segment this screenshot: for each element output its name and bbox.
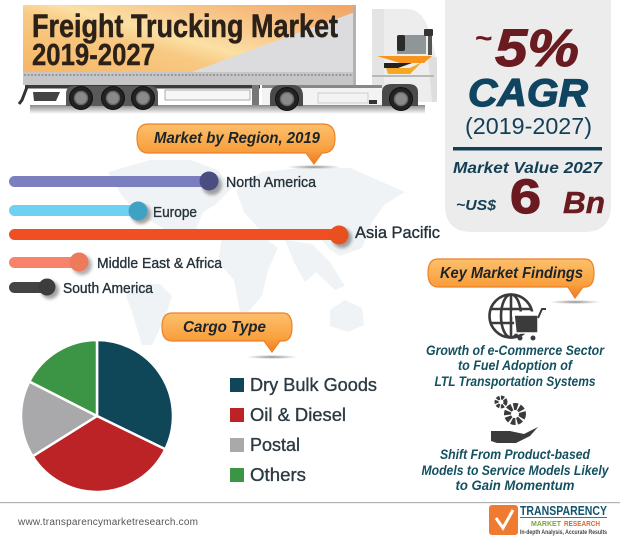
logo: Transparency Market Research xyxy=(489,504,608,536)
logo: Transparency Market Research: MARKET xyxy=(531,519,561,528)
icon: globe with shopping cart xyxy=(490,294,546,340)
finding: e-commerce: LTL Transportation Systems xyxy=(434,374,596,389)
bar: South America: South America xyxy=(63,281,154,297)
icon: hand with gears xyxy=(491,398,538,443)
callout: cargo type: Cargo Type xyxy=(183,319,266,336)
finding: e-commerce xyxy=(426,343,605,389)
logo: Transparency Market Research: In-depth Analysis, Accurate Results xyxy=(520,530,608,536)
chassis xyxy=(25,85,260,88)
bar: Middle East & Africa: Middle East & Africa xyxy=(97,256,223,272)
wheels xyxy=(70,86,412,110)
finding: service models: to Gain Momentum xyxy=(456,478,574,493)
bar: Asia Pacific xyxy=(9,223,440,248)
legend item: others: Others xyxy=(250,464,306,485)
market value figure: Bn xyxy=(563,185,605,220)
bar chart: market by region xyxy=(9,172,440,299)
callout: key market findings: Key Market Findings xyxy=(440,265,583,282)
callout: key market findings xyxy=(428,259,601,304)
market value figure: ~US$ xyxy=(456,197,497,214)
legend item: dry bulk goods: Dry Bulk Goods xyxy=(250,374,377,395)
legend: cargo type xyxy=(230,374,377,485)
bar: North America: North America xyxy=(226,175,317,191)
finding: e-commerce: Growth of e-Commerce Sector xyxy=(426,343,605,358)
CAGR period: (2019-2027) xyxy=(465,113,592,139)
CAGR percentage: 5% xyxy=(495,19,579,78)
world map background xyxy=(108,160,405,345)
legend item: oil and diesel: Oil & Diesel xyxy=(250,404,346,425)
bar: North America xyxy=(9,172,317,195)
pie chart: cargo type xyxy=(21,340,173,492)
market value label: Market Value 2027 xyxy=(453,160,604,177)
callout: market by region xyxy=(137,124,342,169)
title: 2019-2027 xyxy=(32,37,155,72)
logo: Transparency Market Research: RESEARCH xyxy=(564,519,600,528)
CAGR label: CAGR xyxy=(468,72,588,115)
finding: e-commerce: to Fuel Adoption of xyxy=(458,358,573,373)
truck illustration xyxy=(19,5,437,114)
finding: service models xyxy=(422,447,610,493)
bar: Middle East & Africa xyxy=(9,252,223,275)
tractor cab xyxy=(372,9,437,102)
market value figure: 6 xyxy=(510,171,541,224)
trailer xyxy=(23,5,355,77)
bar: Europe: Europe xyxy=(153,205,197,221)
title: Freight Trucking Market xyxy=(32,8,338,44)
footer website: www.transparencymarketresearch.com xyxy=(17,517,198,528)
callout: cargo type xyxy=(162,313,298,359)
bar: Europe xyxy=(9,202,197,224)
legend item: postal: Postal xyxy=(250,434,300,455)
finding: service models: Shift From Product-based xyxy=(440,447,591,462)
CAGR percentage: ~ xyxy=(475,22,493,55)
callout: market by region: Market by Region, 2019 xyxy=(154,130,320,147)
bar: South America xyxy=(9,278,154,299)
panel: CAGR and market value xyxy=(445,0,611,232)
bar: Asia Pacific: Asia Pacific xyxy=(355,223,440,242)
market value figure xyxy=(456,171,605,224)
title xyxy=(32,8,338,72)
